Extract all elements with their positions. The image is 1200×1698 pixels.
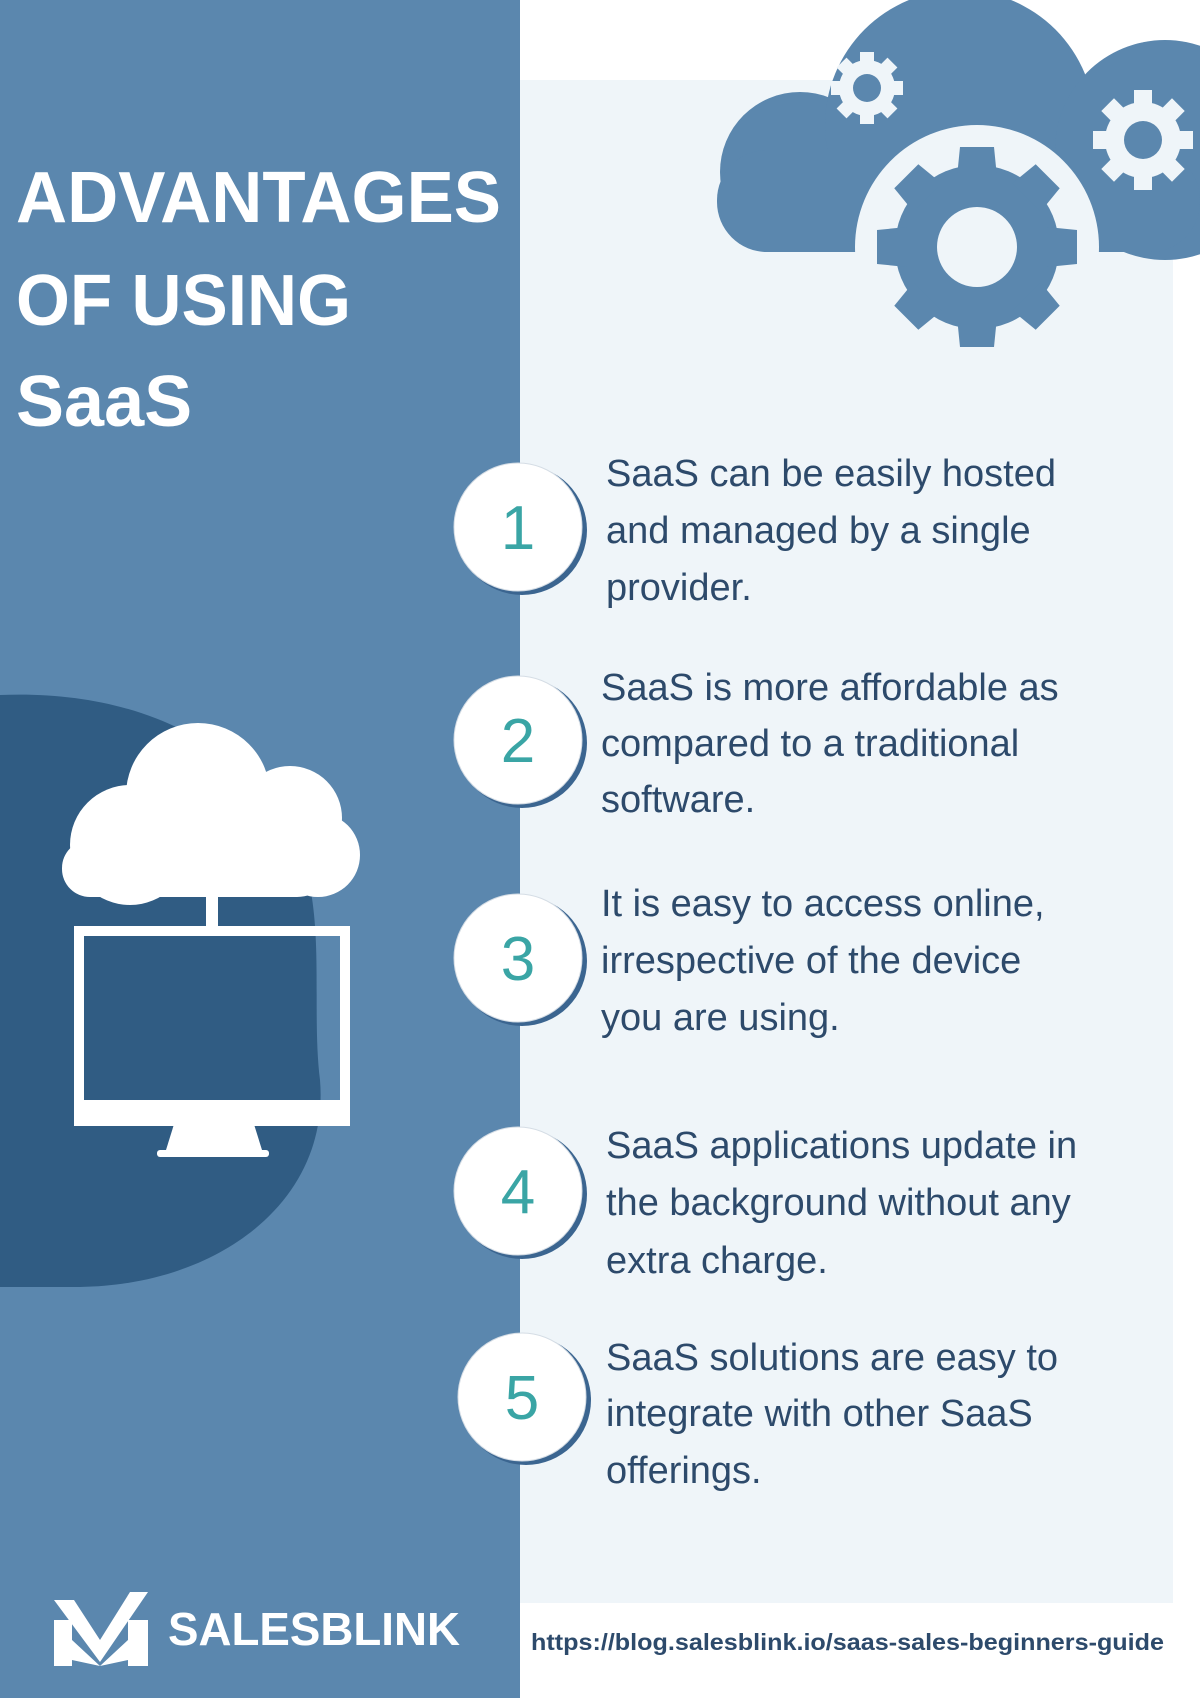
item 2: software.: [601, 779, 755, 821]
item 1: [454, 453, 1056, 609]
item 2: [454, 667, 1059, 821]
logo: [54, 1592, 460, 1666]
item 5: integrate with other SaaS: [606, 1393, 1033, 1435]
icon: cloud with gears: [717, 0, 1200, 402]
item 4: the background without any: [606, 1182, 1071, 1224]
icon: cloud with monitor: [62, 723, 360, 1157]
item 3: [454, 883, 1045, 1039]
item 4: [454, 1125, 1077, 1282]
item 1: and managed by a single: [606, 510, 1031, 552]
logo: SALESBLINK: [168, 1603, 460, 1655]
item 4: 4: [501, 1158, 535, 1227]
item 3: It is easy to access online,: [601, 883, 1045, 925]
medium gear: [1093, 90, 1193, 190]
title: [16, 158, 501, 442]
item 2: 2: [501, 707, 535, 776]
item 5: SaaS solutions are easy to: [606, 1337, 1058, 1379]
title: OF USING: [16, 261, 351, 341]
item 1: 1: [501, 494, 535, 563]
item 2: SaaS is more affordable as: [601, 667, 1059, 709]
url: https://blog.salesblink.io/saas-sales-beginners-guide: [531, 1629, 1164, 1655]
item 3: irrespective of the device: [601, 940, 1021, 982]
item 5: [458, 1333, 1058, 1492]
item 1: provider.: [606, 567, 752, 609]
item 5: 5: [505, 1364, 539, 1433]
light panel: [520, 80, 1173, 1603]
item 1: SaaS can be easily hosted: [606, 453, 1056, 495]
item 3: you are using.: [601, 997, 840, 1039]
left blue panel: [0, 0, 520, 1698]
item 4: SaaS applications update in: [606, 1125, 1077, 1167]
item 4: extra charge.: [606, 1240, 828, 1282]
item 2: compared to a traditional: [601, 723, 1019, 765]
big gear: [877, 147, 1077, 347]
item 3: 3: [501, 925, 535, 994]
small gear: [831, 52, 903, 124]
title: ADVANTAGES: [16, 158, 501, 238]
dark blob: [0, 695, 321, 1287]
title: SaaS: [16, 362, 192, 442]
item 5: offerings.: [606, 1450, 762, 1492]
